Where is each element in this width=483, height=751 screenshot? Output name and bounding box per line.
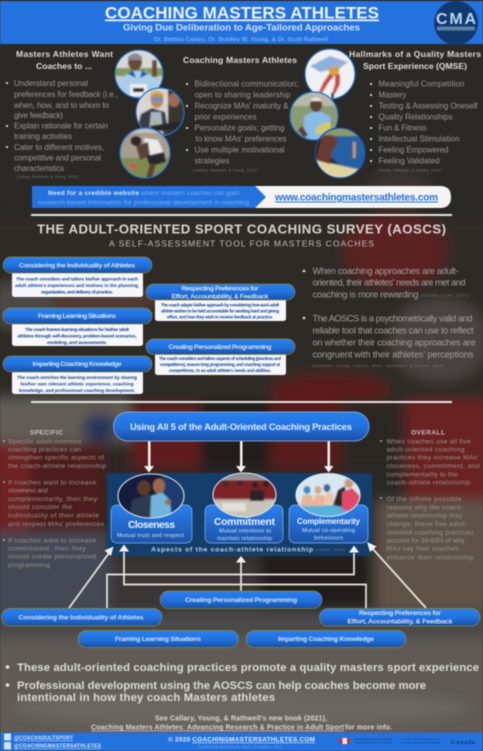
pill: respecting preferences	[320, 608, 480, 626]
photos of masters athletes, left	[114, 48, 186, 180]
pill: imparting coaching knowledge: Imparting Coaching Knowledge	[278, 636, 374, 643]
photo: smiling rowers	[134, 86, 186, 137]
bullet list	[6, 79, 118, 179]
overall text: change, these five adult-	[386, 521, 468, 528]
bullet list: Personalize goals; getting	[194, 124, 284, 132]
bullet list: preferences for feedback (i.e.,	[14, 90, 118, 99]
overall text: practices they increase MAs'	[386, 454, 478, 462]
practice: respecting preferences: Respecting Preferences for	[182, 286, 259, 292]
specific text: coaching practices can	[8, 446, 81, 454]
overall text: When coaches use all five	[386, 438, 471, 446]
specific text: and respect MAs' preferences	[8, 521, 105, 528]
practice: considering individuality: The coach considers and tailors his/her approach to each	[16, 276, 138, 282]
specific text: should consider the	[8, 504, 72, 511]
photo: hand with swim board	[314, 126, 366, 180]
bullet list: (Young, Rathwell, & Callary, 2021)	[378, 168, 441, 172]
practice: creating personalized programming	[146, 339, 295, 375]
bullet list: prior experiences	[194, 112, 256, 122]
photo: complementarity	[294, 472, 362, 518]
header band	[0, 1, 483, 45]
bullet list: Feeling Empowered	[378, 146, 448, 154]
bullet list: when, how, and to whom to	[13, 101, 110, 110]
card: closeness: Closeness	[128, 520, 175, 531]
arrow: framing	[107, 546, 359, 608]
pill: framing learning situations	[78, 630, 238, 648]
overall text: enhance their relationship	[386, 554, 474, 562]
bullet list: strategies	[194, 156, 230, 166]
practice: creating personalized programming: competitions, to an adult athlete's needs and abilities.	[169, 368, 271, 373]
copyright	[168, 736, 315, 749]
practice: considering individuality	[3, 257, 152, 297]
card: complementarity: behaviours	[314, 536, 343, 542]
bullet list: characteristics	[14, 164, 64, 173]
practice: framing learning situations: athletes through self-discovery, problem-based scenarios,	[18, 334, 136, 338]
copyright: © 2020 COACHINGMASTERSATHLETES.COM	[168, 736, 315, 744]
pill: creating personalized programming	[160, 591, 322, 608]
AOSCS findings: (Rathwell, Young, Callary, Motz, Hoffmann, & Currie, 2020)	[312, 364, 444, 368]
social handles: @COACHADULTSPORT	[14, 736, 73, 742]
practice: respecting preferences: effort, and how they wish to receive feedback at practice.	[167, 314, 273, 320]
top pill: using all 5	[114, 412, 369, 441]
bullet list: Fun & Fitness	[378, 124, 426, 132]
heading: Coaches to ...	[36, 61, 92, 71]
practice: framing learning situations: modeling, and assessments.	[47, 340, 107, 345]
bullet list: Intellectual Stimulation	[378, 134, 460, 144]
photo: commitment	[212, 472, 278, 518]
arrows from using all 5 to relationship aspects	[144, 441, 334, 472]
heading: Hallmarks of a Quality Masters	[349, 49, 481, 59]
bullet list: competitive and personal	[14, 154, 101, 162]
practice: respecting preferences: The coach adapts his/her approach by considering how each adult	[161, 302, 280, 308]
icon: twitter	[4, 734, 11, 740]
arrow to complementarity	[324, 441, 334, 472]
copyright: Created by Belalcazar, Motz, & Callary, 2021	[198, 745, 282, 749]
AOSCS findings: (Callary et al., 2021)	[421, 294, 469, 298]
AOSCS findings: on whether their coaching approaches are	[312, 338, 476, 348]
heading: Coaching Masters Athletes	[183, 55, 297, 65]
AOSCS findings: coaching is more rewarding	[312, 290, 418, 300]
practice: imparting coaching knowledge: Imparting Coaching Knowledge	[32, 361, 122, 368]
practice: imparting coaching knowledge: knowledge, and professional coaching development.	[19, 388, 135, 393]
specific text: the coach-athlete relationship	[8, 463, 106, 470]
divider	[31, 214, 452, 216]
website banner	[32, 186, 451, 208]
column: hallmarks of QMSE	[349, 49, 481, 172]
practice: considering individuality: adult athlete's experiences and motives in the planning,	[15, 283, 139, 288]
pill: framing learning situations: Framing Learning Situations	[115, 636, 201, 643]
book reference: See Callary, Young, & Rathwell's new book (2021),	[155, 716, 327, 722]
overall text	[380, 430, 480, 562]
specific text: If coaches want to increase	[8, 480, 96, 486]
pill: respecting preferences: Respecting Preferences for	[359, 610, 441, 617]
specific text: programming	[8, 562, 50, 569]
pill: imparting coaching knowledge	[246, 630, 406, 648]
funder logos: Social Sciences and Humanities	[355, 737, 393, 741]
specific text: complementarity, then they	[8, 496, 98, 503]
bottom pills	[2, 591, 480, 648]
icon: facebook	[4, 742, 11, 750]
panel: aspects of the coach-athlete relationship	[107, 469, 372, 556]
specific text: should create personalized	[8, 554, 96, 560]
bullet list: Understand personal	[14, 79, 88, 88]
practice: imparting coaching knowledge: The coach enriches the learning environment by sharing	[17, 375, 137, 380]
card: commitment	[205, 505, 283, 543]
AOSCS findings: congruent with their athletes' perceptions	[312, 350, 474, 360]
card: complementarity	[289, 505, 368, 543]
book reference: for more info.	[345, 724, 392, 732]
bullet list: open to sharing leadership	[194, 90, 291, 100]
bullet list: Cater to different motives,	[14, 143, 104, 152]
photo: speed skater	[304, 48, 356, 100]
arrow: respecting	[119, 544, 366, 608]
overall text: coach-athlete relationship	[386, 480, 471, 486]
bullet list: Use multiple motivational	[194, 146, 285, 154]
bullet list: (Callary, Rathwell, & Young, 2017)	[193, 168, 257, 172]
specific text: If coaches want to increase	[8, 538, 96, 544]
white URL pill	[250, 186, 451, 208]
card: closeness	[111, 505, 192, 543]
bullet list: Testing & Assessing Oneself	[378, 102, 478, 110]
heading: Masters Athletes Want	[16, 49, 113, 59]
funder logos: sciences humaines du Canada	[401, 740, 440, 744]
AOSCS findings: oriented, their athletes' needs are met and	[312, 278, 466, 288]
divider	[31, 401, 452, 403]
photos of masters athletes, right	[288, 48, 366, 180]
bullet list: Meaningful Competition	[378, 80, 464, 88]
specific text: strengthen specific aspects of	[8, 454, 104, 462]
pill: respecting preferences: Effort, Accountability, & Feedback	[348, 618, 453, 626]
practice: imparting coaching knowledge: his/her own relevant athletic experience, coaching	[20, 382, 134, 386]
logo: CMA	[434, 1, 478, 45]
title: COACHING MASTERS ATHLETES	[105, 4, 379, 22]
pill: considering the individuality	[2, 608, 162, 626]
authors: Dr. Bettina Callary, Dr. Bradley W. Young, & Dr. Scott Rathwell	[154, 37, 328, 43]
bullet list: Mastery	[378, 90, 406, 100]
practice: framing learning situations: Framing Learning Situations	[38, 313, 116, 320]
key takeaways	[6, 662, 479, 704]
banner text	[38, 190, 249, 206]
arrow to commitment	[236, 441, 246, 472]
bullet list: to know MAs' preferences	[196, 134, 286, 144]
AOSCS findings: reliable tool that coaches can use to reflect	[312, 326, 474, 336]
card: complementarity: Mutual co-operating	[302, 528, 355, 534]
AOSCS heading	[37, 222, 446, 248]
practice: considering individuality: Considering the Individuality of Athletes	[19, 262, 135, 270]
overall text: complementarity to the	[386, 472, 458, 478]
key takeaways: intentional in how they coach Masters athletes	[17, 692, 275, 704]
heading: OVERALL	[411, 430, 445, 436]
funder logos: Conseil de recherches en	[401, 737, 440, 741]
caption: (Jowett, 2004)	[316, 548, 345, 552]
overall text: reasons why the coach-	[386, 504, 464, 512]
bullet list: (Callary, Rathwell, & Young, 2015)	[16, 175, 78, 179]
AOSCS findings: The AOSCS is a psychometrically valid and	[312, 314, 472, 324]
subtitle: A SELF-ASSESSMENT TOOL FOR MASTERS COACHES	[109, 238, 374, 248]
practice: imparting coaching knowledge	[3, 356, 152, 394]
banner text: where masters coaches can gain	[140, 190, 239, 197]
caption: Aspects of the coach-athlete relationship	[151, 546, 313, 554]
funder logos	[340, 737, 476, 746]
overall text: account for 39-63% of why	[386, 538, 465, 544]
specific text: individuality of their athlete	[8, 512, 99, 520]
heading: Sport Experience (QMSE)	[363, 61, 467, 71]
arrow: imparting	[367, 542, 426, 608]
AOSCS findings	[303, 266, 476, 368]
overall text: closeness, commitment, and	[386, 463, 480, 470]
card: commitment: maintain relationship	[217, 536, 272, 542]
practice: creating personalized programming: The coach considers and tailors aspects of scheduling (practices and	[159, 356, 281, 361]
banner text: research-based information for professional development in coaching	[38, 200, 249, 206]
practice: creating personalized programming: Creating Personalized Programming	[168, 344, 272, 351]
funder logos: Research Council of Canada	[355, 740, 392, 744]
pill: creating personalized programming: Creating Personalized Programming	[185, 597, 297, 604]
specific text	[3, 430, 106, 569]
photo: runner with victory sign	[114, 48, 164, 100]
blue arrow panel	[32, 186, 266, 208]
subtitle: Giving Due Deliberation to Age-Tailored Approaches	[123, 22, 360, 34]
social handles	[4, 734, 102, 750]
card: closeness: Mutual trust and respect	[117, 533, 184, 539]
title: THE ADULT-ORIENTED SPORT COACHING SURVEY (AOSCS)	[37, 222, 446, 236]
overall text: adult-oriented coaching	[386, 446, 465, 454]
practice: creating personalized programming: competitions), season-long programming, and coaching support at	[160, 362, 281, 367]
specific text: closeness and	[8, 488, 48, 494]
photo: closeness	[116, 472, 186, 520]
key takeaways: These adult-oriented coaching practices promote a quality masters sport experience	[17, 662, 479, 674]
photo: tennis player	[288, 90, 340, 142]
specific text: Specific adult-oriented	[8, 438, 81, 446]
bullet list: Feeling Validated	[378, 156, 440, 166]
book reference	[91, 716, 392, 732]
footer band	[0, 732, 483, 751]
practice: framing learning situations	[3, 308, 152, 346]
bullet list: give feedback)	[14, 111, 63, 120]
practice: respecting preferences: athlete wishes to be held accountable for working hard and giving	[161, 308, 279, 314]
arrow to closeness	[144, 441, 154, 472]
photo: field hockey player	[118, 126, 172, 180]
practice: respecting preferences: Effort, Accountability, & Feedback	[172, 294, 269, 300]
social handles: @COACHINGMASTERSATHLETES	[14, 744, 102, 750]
connector arrows from practices to relationship panel	[69, 542, 426, 608]
column: masters athletes want coaches to	[6, 49, 118, 179]
card: commitment: Mutual intentions to	[219, 528, 271, 534]
bullet list: Explain rationale for certain	[14, 122, 108, 130]
card: commitment: Commitment	[214, 517, 276, 528]
arrow: considering individuality	[69, 546, 114, 608]
specific text: commitment, then they	[8, 546, 87, 552]
column: coaching masters athletes	[183, 55, 298, 172]
URL: www.coachingmastersathletes.com	[274, 192, 438, 204]
overall text: oriented coaching practices	[386, 530, 474, 536]
bullet list: Recognize MAs' maturity &	[194, 102, 289, 110]
practice: respecting preferences	[146, 284, 295, 321]
bullet list: Bidirectional communication;	[194, 80, 298, 88]
practice: considering individuality: organization, and delivery of practice.	[41, 290, 113, 294]
pill: considering the individuality: Considering the Individuality of Athletes	[18, 614, 144, 622]
logo: CMA: CMA	[436, 11, 476, 28]
AOSCS findings: When coaching approaches are adult-	[312, 266, 458, 276]
bullet list	[186, 80, 298, 172]
overall text: Of the infinite possible	[386, 496, 462, 503]
heading	[16, 49, 113, 71]
heading	[349, 49, 481, 71]
card: complementarity: Complementarity	[297, 517, 361, 526]
overall text: MAs say their coaches	[386, 546, 459, 552]
top pill: using all 5: Using All 5 of the Adult-Oriented Coaching Practices	[130, 421, 352, 432]
bullet list	[370, 80, 478, 172]
practice: framing learning situations: The coach frames learning situations for his/her adult	[25, 327, 129, 332]
banner text: Need for a credible website	[48, 190, 139, 197]
arrow: creating	[236, 556, 246, 591]
bullet list: Quality Relationships	[378, 112, 452, 122]
heading: SPECIFIC	[30, 430, 63, 436]
funder logos: Canada	[451, 739, 476, 746]
book reference: Coaching Masters Athletes: Advancing Research & Practice in Adult Sport	[91, 724, 345, 732]
overall text: athlete relationship may	[386, 512, 463, 520]
bullet list: training activities	[14, 132, 72, 141]
key takeaways: Professional development using the AOSCS can help coaches become more	[17, 680, 426, 692]
